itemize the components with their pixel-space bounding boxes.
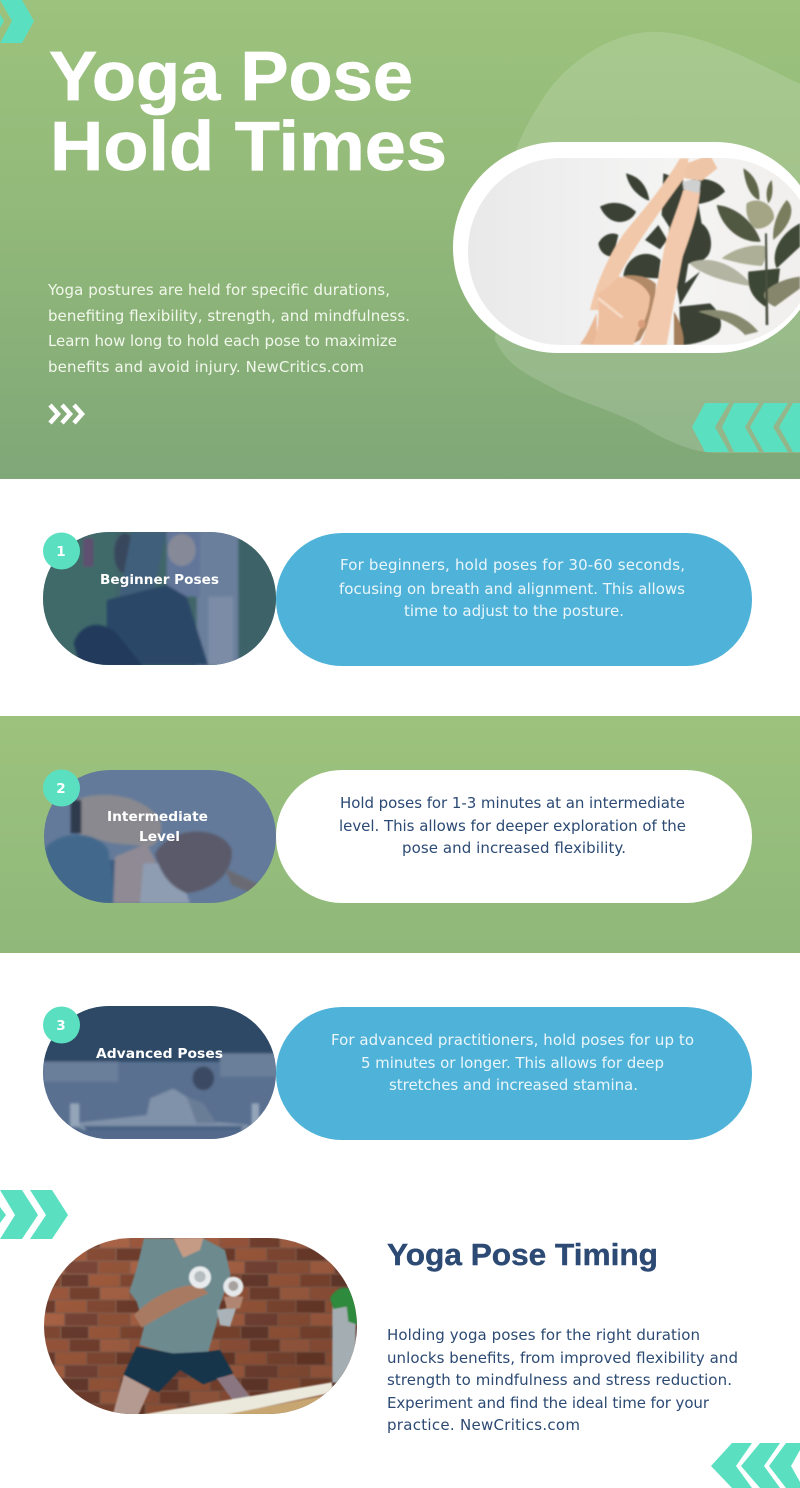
panel: advanced description: 5 minutes or longer. This allows for deep <box>361 1054 664 1072</box>
panel: intermediate description: pose and increased flexibility. <box>402 839 626 857</box>
panel: advanced description: stretches and increased stamina. <box>389 1076 638 1094</box>
badge 3: 3 <box>56 1018 66 1034</box>
icon: bottom-right chevrons <box>711 1443 800 1488</box>
intro text: benefiting flexibility, strength, and mindfulness. <box>48 307 410 325</box>
summary text: unlocks benefits, from improved flexibility and <box>387 1349 738 1367</box>
panel: advanced description <box>276 1007 752 1140</box>
photo: woman stretching in white frame <box>453 142 800 353</box>
badge 1 <box>43 532 80 570</box>
title <box>49 37 447 185</box>
icon: right chevrons <box>692 403 800 452</box>
panel: beginner description: focusing on breath and alignment. This allows <box>339 580 685 598</box>
badge 3 <box>43 1006 80 1044</box>
icon: lower-left chevrons <box>0 1190 68 1239</box>
summary text: practice. NewCritics.com <box>387 1416 580 1434</box>
label: intermediate level: Level <box>139 829 180 845</box>
badge 2 <box>43 770 80 806</box>
summary text: Experiment and find the ideal time for your <box>387 1394 710 1412</box>
label: advanced poses: Advanced Poses <box>96 1046 223 1062</box>
panel: beginner description <box>276 533 752 666</box>
panel: advanced description: For advanced practitioners, hold poses for up to <box>331 1031 694 1049</box>
photo: man with controllers against brick wall <box>40 1235 360 1417</box>
label: beginner poses: Beginner Poses <box>100 572 219 588</box>
title: Yoga Pose <box>49 37 413 115</box>
label: intermediate level <box>107 809 208 845</box>
label: intermediate level: Intermediate <box>107 809 208 825</box>
summary text: Holding yoga poses for the right duration <box>387 1326 700 1344</box>
icon: top-left chevrons <box>0 0 34 43</box>
panel: hero header <box>0 0 800 479</box>
intro text: Learn how long to hold each pose to maximize <box>48 332 397 350</box>
panel: beginner description: time to adjust to the posture. <box>404 602 624 620</box>
badge 1: 1 <box>56 544 66 560</box>
intro text <box>47 281 410 376</box>
photo: intermediate level <box>43 770 276 903</box>
summary text <box>387 1326 738 1434</box>
panel: intermediate description: Hold poses for 1-3 minutes at an intermediate <box>340 794 685 812</box>
intro text: benefits and avoid injury. NewCritics.com <box>48 358 364 376</box>
decorative blob <box>495 32 800 453</box>
panel: row 2 green band <box>0 716 800 953</box>
icon: white triple chevron <box>50 405 82 423</box>
photo: advanced poses <box>43 1003 277 1142</box>
panel: intermediate description <box>276 770 752 903</box>
panel: intermediate description: level. This allows for deeper exploration of the <box>339 817 686 835</box>
title: Hold Times <box>50 107 447 185</box>
heading: yoga pose timing: Yoga Pose Timing <box>387 1237 658 1272</box>
panel: beginner description: For beginners, hold poses for 30-60 seconds, <box>340 556 685 574</box>
summary text: strength to mindfulness and stress reduction. <box>387 1371 732 1389</box>
badge 2: 2 <box>56 781 66 797</box>
photo: beginner poses <box>43 530 277 667</box>
panel: row 1 background <box>0 479 800 716</box>
intro text: Yoga postures are held for specific durations, <box>47 281 390 299</box>
